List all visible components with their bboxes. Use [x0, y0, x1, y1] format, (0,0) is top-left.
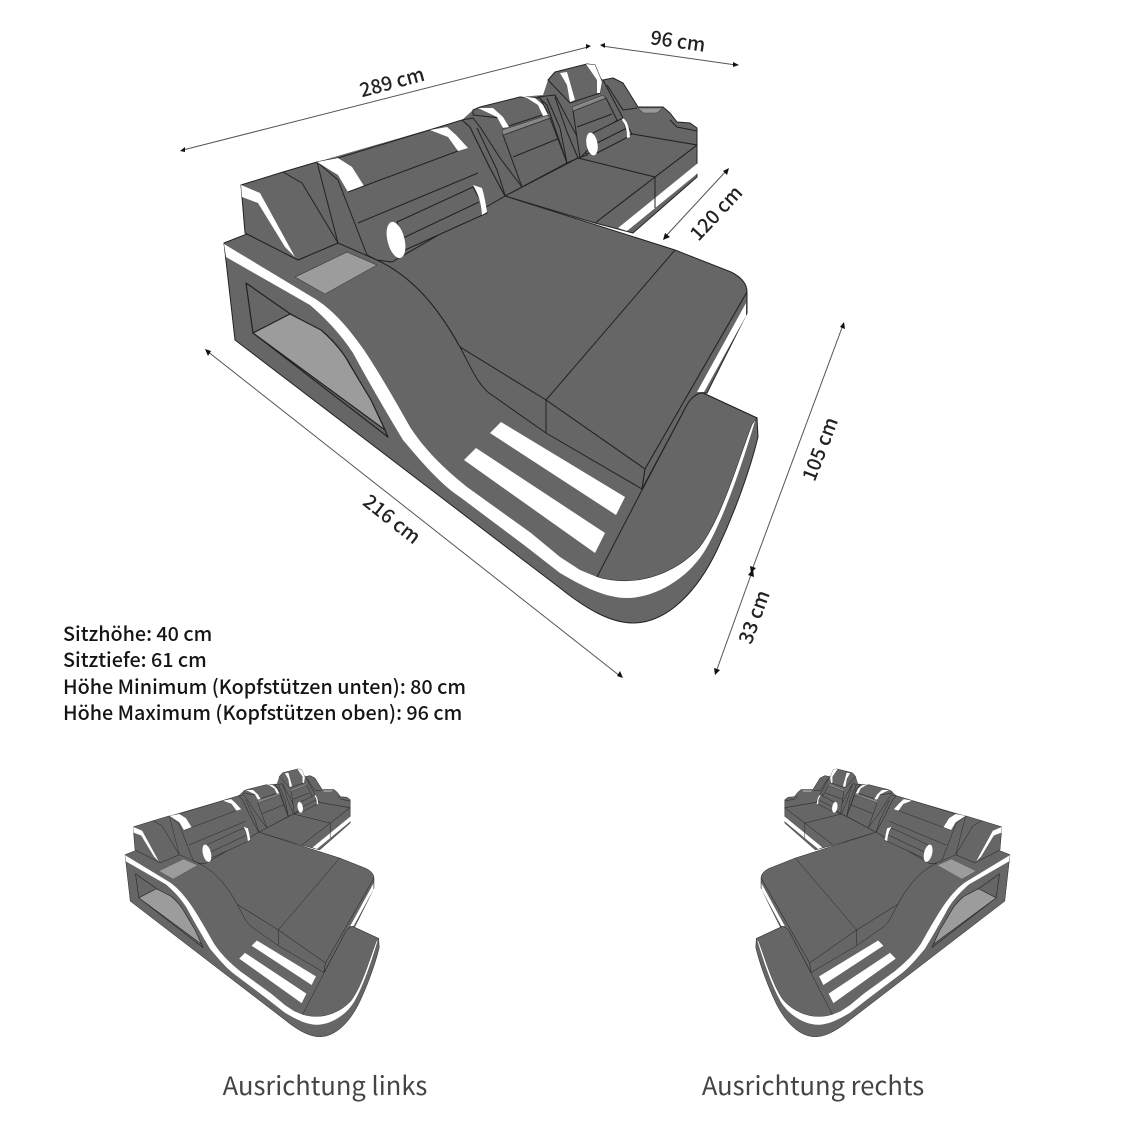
dimension 120 cm [663, 168, 748, 246]
dimension 289 cm [180, 44, 591, 152]
lower body and footrest base [224, 234, 758, 623]
dimension 105 cm: 105 cm [793, 412, 844, 485]
middle backrest [503, 118, 567, 187]
specifications text block [63, 618, 466, 726]
chaise side strip [642, 292, 747, 489]
specifications text block: Sitztiefe: 61 cm [63, 644, 207, 673]
dimension 105 cm [750, 322, 845, 573]
right backrest [573, 98, 617, 158]
right headrest [548, 64, 606, 111]
right armrest [603, 78, 697, 145]
side tray [295, 252, 377, 294]
main sofa illustration [224, 64, 758, 623]
dimension 33 cm [714, 569, 776, 675]
dimension 96 cm [600, 21, 739, 67]
specifications text block: Höhe Minimum (Kopfstützen unten): 80 cm [63, 671, 466, 700]
backrest backing [317, 64, 638, 262]
footrest top [597, 393, 757, 581]
dimension 120 cm: 120 cm [682, 178, 748, 246]
storage niche [246, 283, 388, 437]
left armrest block [241, 162, 338, 260]
divider left [462, 118, 522, 196]
dimension 289 cm: 289 cm [356, 58, 427, 103]
specifications text block: Sitzhöhe: 40 cm [63, 618, 212, 647]
dimension 216 cm: 216 cm [358, 486, 428, 550]
small sofa: right orientation [756, 769, 1010, 1037]
far seat cushion [505, 134, 697, 223]
left bolster pillow [383, 185, 487, 260]
caption: Ausrichtung links: Ausrichtung links [223, 1066, 427, 1103]
right bolster pillow [585, 118, 630, 156]
dimension 216 cm [205, 349, 623, 678]
far seat base [595, 145, 698, 233]
caption: Ausrichtung rechts: Ausrichtung rechts [702, 1066, 924, 1103]
chaise cushion [377, 196, 747, 489]
dimension 33 cm: 33 cm [730, 586, 776, 647]
specifications text block: Höhe Maximum (Kopfstützen oben): 96 cm [63, 697, 462, 726]
divider right [538, 95, 587, 163]
left backrest section [317, 120, 505, 262]
small sofa: left orientation [125, 769, 379, 1037]
middle headrest [473, 96, 550, 135]
footrest white stripes [464, 422, 625, 553]
dimension 96 cm: 96 cm [649, 21, 708, 58]
white piping [224, 244, 756, 598]
